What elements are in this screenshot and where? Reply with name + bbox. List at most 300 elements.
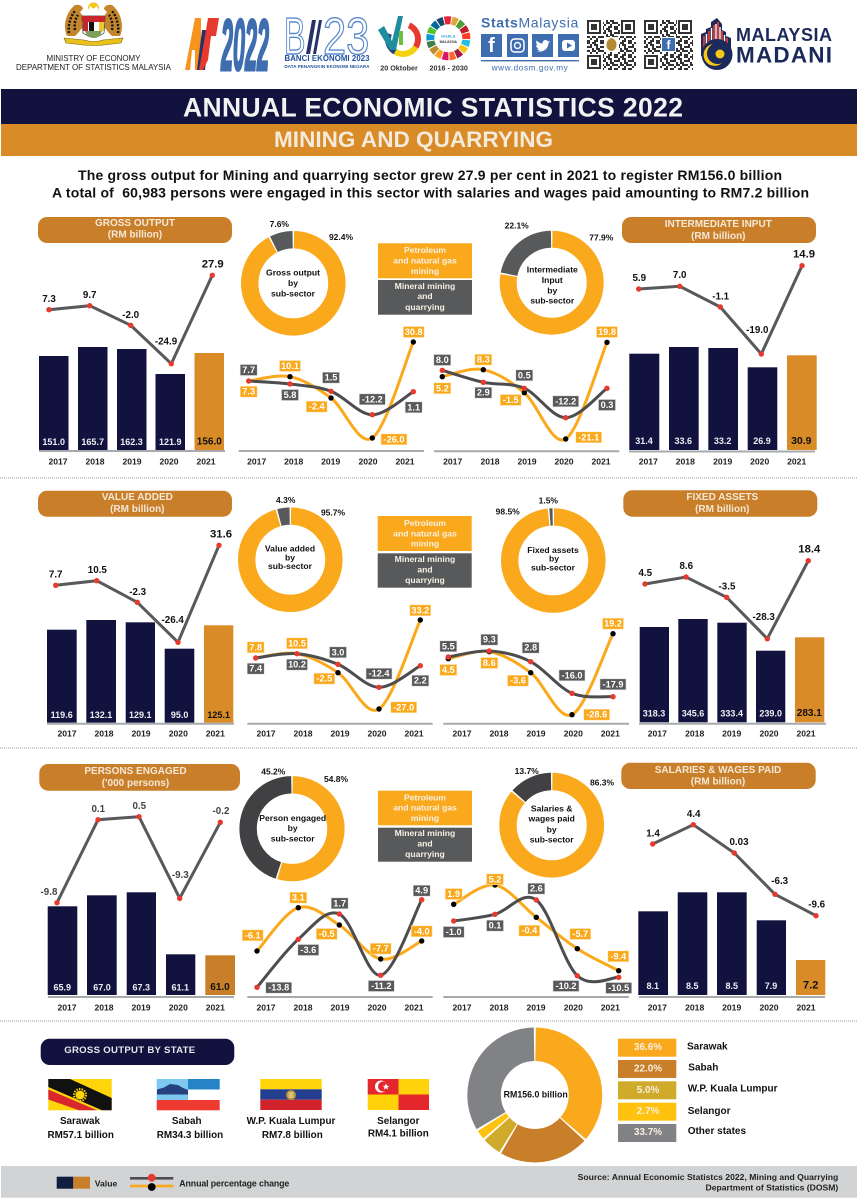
spline chart: persons engaged by sub-sector: -0.5 [319,929,335,939]
logo: Malaysia Madani: MADANI [736,42,832,68]
spline chart: gross output by sub-sector: 2018 [284,457,303,467]
legend: state share: Other states [688,1126,746,1137]
donut: intermediate input by sub-sector: 77.9% [589,232,614,242]
line chart: persons engaged annual change [41,801,230,905]
donut: value added by sub-sector: 4.3% [276,495,296,505]
logo: Banci Ekonomi 2023: BANCI EKONOMI 2023 [284,54,370,63]
spline chart: persons engaged by sub-sector: 2020 [367,1002,387,1012]
spline chart: salaries and wages by sub-sector: -10.5 [608,983,629,993]
donut: value added by sub-sector: Value added [265,544,315,554]
bar chart: persons engaged value: 2017 [57,1002,77,1012]
spline chart: intermediate input by sub-sector [434,326,619,467]
logo: coat of arms [64,2,123,46]
bar chart: salaries and wages value: 2017 [648,1002,667,1012]
donut: value added by sub-sector: by [285,552,295,562]
summary text: A total of 60,983 persons were engaged in this sector with salaries and wages paid amounting to RM7.2 billion [52,185,809,201]
bar chart: salaries and wages value: 2021 [796,1002,816,1012]
spline chart: fixed assets by sub-sector: 2021 [601,729,620,739]
line chart: persons engaged annual change: 0.5 [132,801,147,812]
line chart: value added annual change: 31.6 [210,528,232,540]
spline chart: fixed assets by sub-sector: 2.8 [524,643,537,653]
spline chart: gross output by sub-sector: 1.5 [325,373,337,383]
bar chart: gross output value: 2019 [122,457,142,467]
spline chart: intermediate input by sub-sector: -12.2 [555,396,576,406]
spline chart: value added by sub-sector: 10.5 [288,638,306,648]
QR code: Facebook: f [666,38,672,52]
heading: gross output: GROSS OUTPUT [95,218,175,229]
spline chart: fixed assets by sub-sector: 8.6 [483,658,496,668]
spline chart: salaries and wages by sub-sector: 5.2 [489,874,501,884]
spline chart: gross output by sub-sector: -26.0 [384,434,404,444]
heading: gross output [38,217,232,243]
spline chart: value added by sub-sector: 7.4 [249,664,263,674]
line chart: gross output annual change: 7.3 [42,294,56,305]
line chart: salaries and wages annual change: -6.3 [771,876,789,887]
legend: value swatch [57,1177,117,1189]
flag: Sabah [157,1079,220,1110]
legend: sub-sector row 1: and natural gas [393,256,457,266]
heading: salaries and wages paid [621,763,816,789]
state value: Selangor: Selangor [377,1116,420,1127]
panel: gross output [38,217,232,467]
spline chart: persons engaged by sub-sector: -11.2 [371,981,392,991]
donut: intermediate input by sub-sector: by [547,285,558,295]
line chart: fixed assets annual change: 4.5 [638,568,653,579]
spline chart: fixed assets by sub-sector: 5.5 [442,641,455,651]
spline chart: persons engaged by sub-sector: -4.0 [414,926,430,936]
donut: gross output by sub-sector [250,219,353,327]
flag: Sarawak [48,1079,112,1110]
bar chart: gross output value: 156.0 [197,436,222,448]
logo: StatsMalaysia social block: f [488,35,495,57]
spline chart: gross output by sub-sector: 2020 [358,457,378,467]
donut: intermediate input by sub-sector: Intermediate [527,265,578,275]
bar chart: fixed assets value: 2021 [796,729,816,739]
donut: intermediate input by sub-sector [505,220,614,326]
donut: salaries and wages by sub-sector: sub-sector [530,835,574,845]
bar chart: value added value: 129.1 [129,710,152,720]
flag: Selangor [368,1079,429,1110]
line chart: persons engaged annual change: 0.1 [91,804,106,815]
line chart: fixed assets annual change: 18.4 [798,544,821,556]
spline chart: persons engaged by sub-sector: -7.7 [373,944,389,954]
donut: gross output by sub-sector: 92.4% [329,232,353,242]
legend: sub-sector row 1: and [417,291,433,301]
spline chart: fixed assets by sub-sector [440,618,629,739]
donut: gross output by sub-sector: by [288,278,298,288]
spline chart: salaries and wages by sub-sector: 2018 [489,1002,509,1012]
line chart: gross output annual change: -24.9 [155,336,178,348]
spline chart: salaries and wages by sub-sector: -1.0 [446,927,462,937]
logo: 20 Oktober: 20 Oktober [380,64,418,72]
heading: gross output by state [41,1039,234,1065]
spline chart: value added by sub-sector: 2019 [330,729,350,739]
heading: gross output by state: GROSS OUTPUT BY STATE [64,1045,196,1056]
spline chart: value added by sub-sector: 2018 [293,729,313,739]
line chart: salaries and wages annual change: -9.6 [808,900,826,910]
subtitle banner [1,124,857,156]
QR code: Facebook [643,19,694,71]
logo: StatsMalaysia social block [481,14,579,72]
bar chart: intermediate input value: 2020 [750,457,769,467]
spline chart: intermediate input by sub-sector: 2020 [554,457,574,467]
bar chart: salaries and wages value: 2020 [759,1002,779,1012]
spline chart: fixed assets by sub-sector: 2019 [526,729,546,739]
state value: Sabah: RM34.3 billion [157,1130,223,1141]
spline chart: persons engaged by sub-sector: -13.8 [268,983,289,993]
bar chart: gross output value: 2020 [159,457,179,467]
bar chart: gross output value: 2021 [196,457,216,467]
summary text [52,167,809,201]
state value: Selangor: RM4.1 billion [368,1128,429,1140]
state value: Sabah: Sabah [172,1116,202,1127]
spline chart: intermediate input by sub-sector: -1.5 [503,395,519,405]
spline chart: fixed assets by sub-sector: -3.6 [510,676,526,686]
bar chart: persons engaged value: 2020 [169,1002,188,1012]
bar chart: value added value: 95.0 [171,710,188,720]
bar chart: fixed assets value: 2020 [759,729,779,739]
spline chart: persons engaged by sub-sector: 4.9 [415,886,428,896]
subtitle banner: MINING AND QUARRYING [274,127,553,152]
line chart: persons engaged annual change: -9.8 [41,887,58,898]
donut: fixed assets by sub-sector: by [549,554,559,564]
legend: sub-sector row 3: and natural gas [393,803,457,813]
spline chart: gross output by sub-sector [239,326,424,467]
donut: persons engaged by sub-sector: 54.8% [324,774,348,784]
legend: sub-sector row 2: and [417,564,433,574]
state value: Kuala Lumpur [247,1116,336,1141]
legend: state share: 33.7% [634,1127,662,1138]
legend: state share: Sabah [688,1062,718,1074]
spline chart: value added by sub-sector [247,605,433,739]
bar chart: gross output value [39,347,225,467]
bar chart: intermediate input value: 33.2 [714,436,731,446]
spline chart: intermediate input by sub-sector: 2021 [591,457,611,467]
logo: Banci Ekonomi 2023: B [284,8,306,66]
bar chart: fixed assets value [639,619,826,739]
legend: sub-sector row 1: mining [411,266,439,276]
donut: fixed assets by sub-sector: Fixed assets [527,545,579,555]
panel: intermediate input [622,217,817,467]
agency name [16,54,172,72]
spline chart: intermediate input by sub-sector: -21.1 [578,432,599,442]
line chart: intermediate input annual change: -1.1 [712,292,730,302]
legend: sub-sector row 3: and [417,838,433,848]
line chart: salaries and wages annual change: 4.4 [687,809,701,820]
spline chart: intermediate input by sub-sector: 2018 [480,457,500,467]
bar chart: persons engaged value: 67.0 [93,982,111,992]
line chart: value added annual change: -26.4 [162,615,184,626]
logo: SDG wheel [427,17,469,72]
spline chart: gross output by sub-sector: 10.1 [281,361,299,371]
legend: sub-sector row 3: mining [411,813,439,823]
bar chart: persons engaged value: 61.0 [210,982,230,993]
heading: salaries and wages paid: SALARIES & WAGES PAID [655,765,781,776]
state value: Sarawak: Sarawak [60,1116,101,1127]
bar chart: fixed assets value: 2019 [722,729,741,739]
spline chart: persons engaged by sub-sector: 2017 [256,1002,276,1012]
line chart: value added annual change [49,528,232,645]
logo: AES 2022 [185,6,269,86]
spline chart: fixed assets by sub-sector: 2020 [564,729,583,739]
bar chart: value added value: 2020 [169,729,188,739]
spline chart: value added by sub-sector: 10.2 [288,660,306,670]
logo: Malaysia Madani: MALAYSIA [736,25,832,45]
spline chart: persons engaged by sub-sector: 1.7 [333,898,346,908]
state value: Sarawak [47,1116,114,1141]
spline chart: intermediate input by sub-sector: 0.3 [601,400,613,410]
spline chart: gross output by sub-sector: 2019 [321,457,340,467]
heading: intermediate input [622,217,816,243]
legend: state share: 36.6% [634,1042,662,1053]
spline chart: gross output by sub-sector: 5.8 [284,390,296,400]
footer band [1,1166,857,1198]
bar chart: salaries and wages value: 8.5 [686,981,699,991]
bar chart: intermediate input value [629,347,817,467]
flag: Kuala Lumpur [260,1079,322,1110]
bar chart: intermediate input value: 2019 [713,457,732,467]
legend: sub-sector row 2: Mineral mining [395,554,455,564]
legend: state share: 5.0% [637,1085,659,1096]
spline chart: fixed assets by sub-sector: -17.9 [603,679,623,689]
donut: persons engaged by sub-sector [248,766,348,873]
donut: persons engaged by sub-sector: 45.2% [261,766,286,776]
spline chart: intermediate input by sub-sector: 8.0 [436,355,449,365]
spline chart: intermediate input by sub-sector: 5.2 [436,383,449,393]
line chart: gross output annual change: -2.0 [122,310,140,321]
state value: Selangor [368,1116,429,1140]
heading: salaries and wages paid: (RM billion) [691,776,745,788]
spline chart: fixed assets by sub-sector: 9.3 [483,635,496,645]
heading: fixed assets: FIXED ASSETS [686,492,759,503]
logo: Malaysia Madani [701,18,832,70]
legend: sub-sector row 2: mining [411,539,439,549]
logo: AES 2022: 2022 [221,6,269,86]
bar chart: salaries and wages value [638,892,825,1012]
summary text: The gross output for Mining and quarrying sector grew 27.9 per cent in 2021 to register RM156.0 billion [78,167,782,183]
legend: sub-sector row 3: quarrying [405,849,445,859]
bar chart: intermediate input value: 2017 [639,457,658,467]
logo: SDG wheel: 2016 - 2030 [430,64,468,72]
line chart: intermediate input annual change: 14.9 [793,249,815,261]
state value: Sarawak: RM57.1 billion [47,1130,114,1141]
panel: value added [38,491,234,739]
bar chart: salaries and wages value: 2019 [722,1002,741,1012]
agency name: MINISTRY OF ECONOMY [46,54,141,63]
legend: sub-sector row 2: Petroleum [404,518,446,528]
line chart: salaries and wages annual change: 0.03 [729,837,749,848]
bar chart: persons engaged value: 61.1 [172,982,189,992]
donut: value added by sub-sector [247,495,345,603]
spline chart: salaries and wages by sub-sector [443,874,632,1012]
donut: intermediate input by sub-sector: Input [542,275,563,285]
bar chart: value added value [47,620,234,739]
legend: state share [618,1039,778,1142]
legend: value swatch: Value [95,1179,117,1189]
donut: fixed assets by sub-sector: 98.5% [496,507,520,517]
bar chart: fixed assets value: 239.0 [759,709,782,719]
panel: salaries and wages paid [621,763,826,1012]
donut: salaries and wages by sub-sector: by [547,824,557,834]
spline chart: value added by sub-sector: 2017 [256,729,276,739]
bar chart: fixed assets value: 345.6 [682,709,704,719]
bar chart: intermediate input value: 2018 [676,457,695,467]
bar chart: salaries and wages value: 8.5 [725,981,738,991]
spline chart: gross output by sub-sector: 2017 [247,457,266,467]
legend: sub-sector row 1: Mineral mining [395,281,455,291]
donut: gross output by sub-sector: sub-sector [271,288,316,298]
bar chart: intermediate input value: 26.9 [753,436,771,446]
bar chart: salaries and wages value: 7.9 [765,981,777,991]
legend: annual percentage change [130,1174,289,1191]
spline chart: intermediate input by sub-sector: 0.5 [518,370,531,380]
donut: persons engaged by sub-sector: sub-sector [271,833,315,843]
bar chart: gross output value: 162.3 [120,437,143,447]
bar chart: intermediate input value: 31.4 [635,436,653,446]
legend: sub-sector row 3 [378,791,472,862]
line chart: gross output annual change: 9.7 [83,290,97,301]
legend: sub-sector row 2 [378,516,472,588]
logo: Banci Ekonomi 2023: DATA PENANGKIN EKONOMI NEGARA [284,64,370,69]
spline chart: value added by sub-sector: 7.8 [249,642,262,652]
spline chart: persons engaged by sub-sector: 2021 [404,1002,424,1012]
spline chart: value added by sub-sector: 3.0 [332,647,344,657]
title banner [1,89,857,124]
bar chart: fixed assets value: 2017 [648,729,667,739]
spline chart: intermediate input by sub-sector: 8.3 [477,355,490,365]
line chart: fixed assets annual change: -3.5 [719,582,736,592]
spline chart: gross output by sub-sector: 7.7 [242,365,255,375]
legend: state share: Selangor [688,1106,731,1117]
spline chart: salaries and wages by sub-sector: 1.9 [447,889,460,899]
spline chart: gross output by sub-sector: 2021 [395,457,415,467]
bar chart: gross output value: 2017 [48,457,68,467]
spline chart: gross output by sub-sector: 7.3 [242,387,255,397]
donut: gross output share by state [484,1044,586,1146]
spline chart: value added by sub-sector: -12.4 [369,669,390,679]
spline chart: intermediate input by sub-sector: 19.8 [598,327,616,337]
logo: SDG wheel: MALAYSIA [440,40,458,44]
bar chart: fixed assets value: 333.4 [720,709,743,719]
bar chart: value added value: 2019 [131,729,151,739]
spline chart: fixed assets by sub-sector: -16.0 [562,670,582,680]
line chart: intermediate input annual change: 7.0 [673,270,687,281]
legend: sub-sector row 1 [378,243,472,315]
legend: sub-sector row 2: quarrying [405,575,445,585]
spline chart: salaries and wages by sub-sector: -10.2 [556,981,576,991]
bar chart: gross output value: 121.9 [159,437,182,447]
line chart: salaries and wages annual change: 1.4 [646,828,660,840]
donut: intermediate input by sub-sector: 22.1% [505,220,529,230]
agency name: DEPARTMENT OF STATISTICS MALAYSIA [16,63,172,72]
legend: sub-sector row 1: Petroleum [404,245,446,255]
state value: Kuala Lumpur: RM7.8 billion [262,1130,323,1141]
bar chart: value added value: 125.1 [207,710,230,720]
state value: Sabah [157,1116,223,1141]
bar chart: value added value: 119.6 [51,710,73,720]
heading: intermediate input: INTERMEDIATE INPUT [665,219,772,230]
spline chart: value added by sub-sector: 2020 [367,729,387,739]
bar chart: persons engaged value: 2021 [206,1002,225,1012]
heading: intermediate input: (RM billion) [691,231,746,242]
donut: intermediate input by sub-sector: sub-sector [530,296,575,306]
heading: gross output: (RM billion) [108,230,162,240]
legend: sub-sector row 3: Petroleum [404,792,446,802]
spline chart: fixed assets by sub-sector: 2017 [452,729,472,739]
heading: fixed assets: (RM billion) [695,504,750,515]
logo: Banci Ekonomi 2023: 23 [323,7,369,65]
bar chart: fixed assets value: 318.3 [643,709,665,719]
bar chart: persons engaged value: 2019 [131,1002,151,1012]
heading: persons engaged: PERSONS ENGAGED [84,766,187,777]
heading: value added: VALUE ADDED [102,492,173,503]
line chart: value added annual change: 10.5 [88,565,107,576]
spline chart: fixed assets by sub-sector: 2018 [489,729,509,739]
legend: state share: 22.0% [634,1064,662,1074]
spline chart: fixed assets by sub-sector: -28.6 [586,710,607,720]
bar chart: salaries and wages value: 7.2 [803,980,818,992]
heading: value added [38,491,232,517]
spline chart: persons engaged by sub-sector: 3.1 [292,893,305,903]
spline chart: salaries and wages by sub-sector: 2017 [452,1002,472,1012]
legend: sub-sector row 2: and natural gas [393,528,457,538]
bar chart: persons engaged value: 2018 [94,1002,114,1012]
spline chart: salaries and wages by sub-sector: 2021 [601,1002,620,1012]
spline chart: fixed assets by sub-sector: 4.5 [442,665,455,675]
spline chart: intermediate input by sub-sector: 2.9 [477,388,490,398]
bar chart: salaries and wages value: 8.1 [646,981,659,991]
spline chart: persons engaged by sub-sector: -3.6 [300,945,316,955]
spline chart: gross output by sub-sector: 1.1 [407,402,420,412]
donut: salaries and wages by sub-sector [508,766,614,869]
spline chart: value added by sub-sector: -2.5 [316,674,332,684]
bar chart: intermediate input value: 2021 [787,457,806,467]
line chart: persons engaged annual change: -0.2 [213,806,230,817]
bar chart: value added value: 2018 [94,729,114,739]
spline chart: persons engaged by sub-sector: 2019 [330,1002,350,1012]
spline chart: salaries and wages by sub-sector: 2020 [564,1002,583,1012]
legend: state share: 2.7% [637,1106,659,1117]
bar chart: salaries and wages value: 2018 [685,1002,704,1012]
spline chart: value added by sub-sector: 2021 [404,729,424,739]
legend: sub-sector row 1: quarrying [405,302,445,312]
spline chart: value added by sub-sector: 2.2 [414,676,427,686]
bar chart: gross output value: 2018 [85,457,105,467]
line chart: fixed assets annual change: -28.3 [753,612,775,623]
line chart: intermediate input annual change [632,249,815,357]
bar chart: value added value: 2021 [206,729,225,739]
heading: value added: (RM billion) [110,504,165,515]
donut: salaries and wages by sub-sector: Salaries & [531,803,572,813]
line chart: gross output annual change [42,258,224,366]
donut: persons engaged by sub-sector: by [288,823,298,833]
line chart: value added annual change: 7.7 [49,570,63,580]
line chart: value added annual change: -2.3 [129,587,147,598]
spline chart: salaries and wages by sub-sector: 2019 [526,1002,546,1012]
donut: salaries and wages by sub-sector: 13.7% [515,766,539,776]
legend: sub-sector row 3: Mineral mining [395,828,455,838]
bar chart: gross output value: 165.7 [81,437,104,447]
donut: fixed assets by sub-sector [496,495,597,604]
heading: persons engaged: ('000 persons) [102,778,169,789]
logo: 20 Oktober [378,16,418,72]
logo: Banci Ekonomi 2023 [284,7,370,69]
legend: state share: Sarawak [687,1042,728,1052]
donut: salaries and wages by sub-sector: wages paid [528,814,575,824]
spline chart: salaries and wages by sub-sector: -5.7 [572,929,588,939]
spline chart: value added by sub-sector: -27.0 [393,702,414,712]
bar chart: value added value: 132.1 [90,710,112,720]
